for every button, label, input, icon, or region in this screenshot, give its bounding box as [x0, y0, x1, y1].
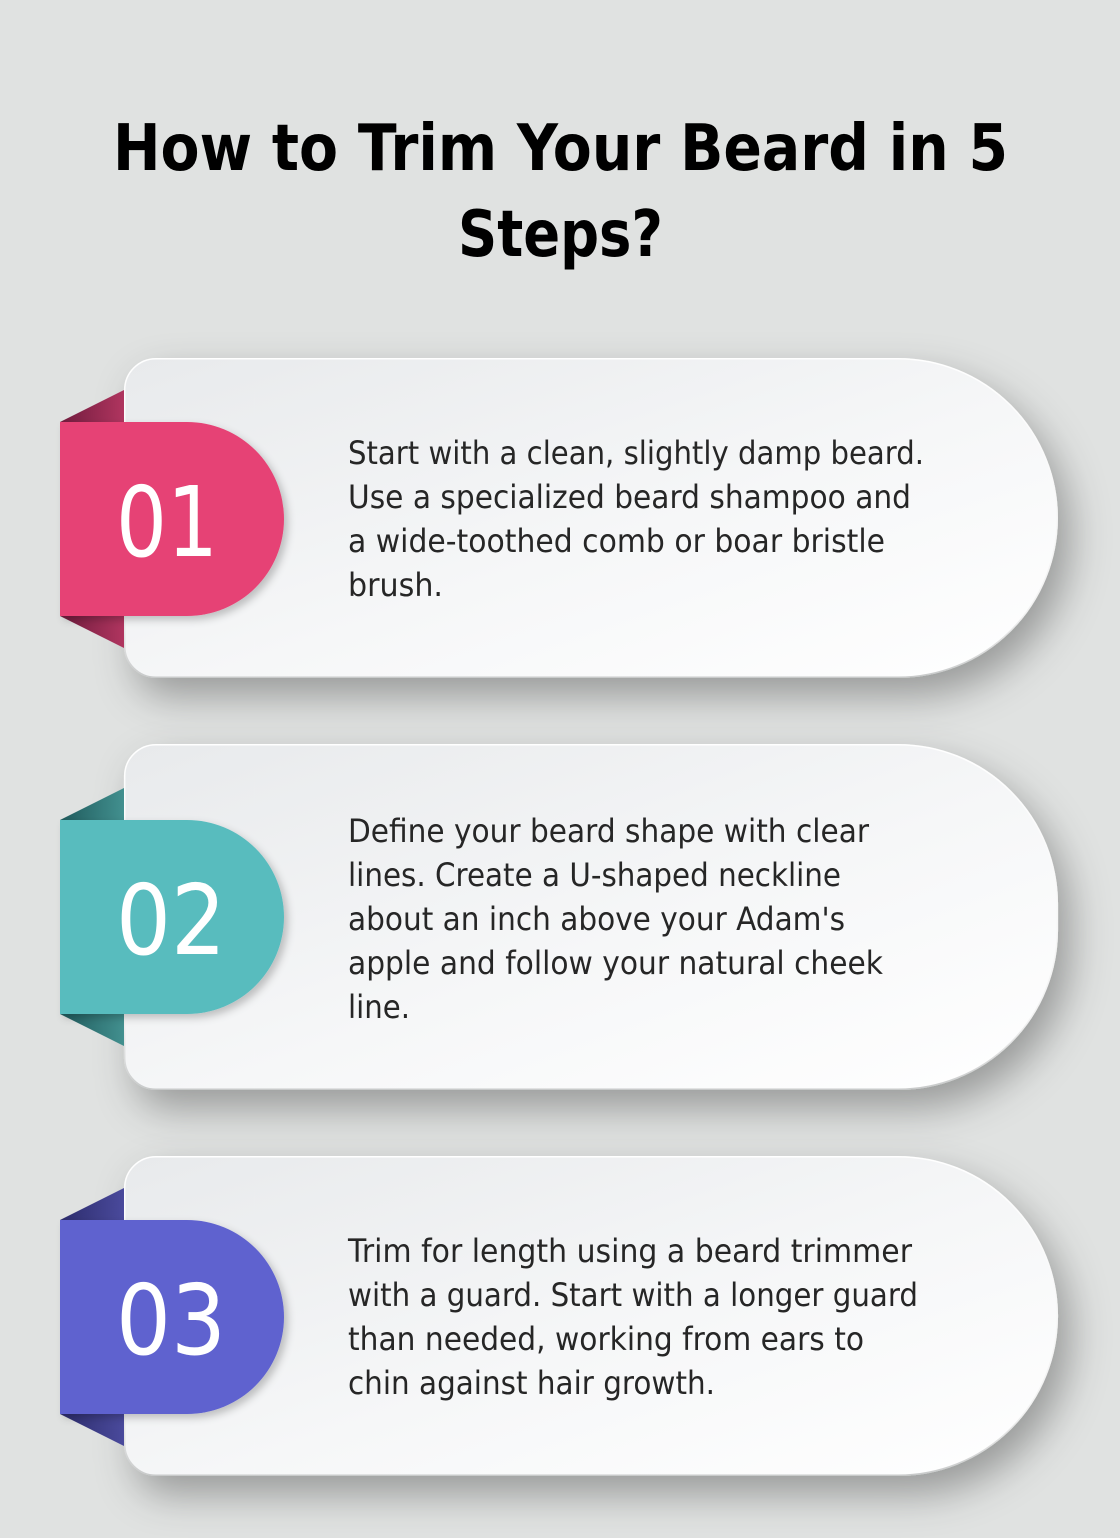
step 1 text: a wide-toothed comb or boar bristle: [348, 522, 885, 560]
step 2 text: line.: [348, 988, 410, 1026]
ribbon fold 3: [60, 1188, 124, 1446]
number badge 3: [60, 1220, 284, 1414]
number 02: 02: [116, 864, 226, 977]
number badge 2: [60, 820, 284, 1014]
step 3 text: Trim for length using a beard trimmer: [347, 1232, 913, 1270]
step 1 text: [348, 434, 924, 604]
ribbon fold 2: [60, 788, 124, 1046]
card 3 background: [125, 1157, 1057, 1475]
step 3 text: than needed, working from ears to: [348, 1320, 864, 1358]
number 03: 03: [116, 1264, 226, 1377]
step 2 text: apple and follow your natural cheek: [348, 944, 883, 982]
step 2 text: Define your beard shape with clear: [348, 812, 870, 850]
step 1 text: brush.: [348, 566, 443, 604]
title: How to Trim Your Beard in 5: [113, 112, 1008, 186]
step 2 text: [348, 812, 883, 1026]
panel: step 3: [60, 1157, 1057, 1475]
title: [113, 112, 1008, 272]
step 3 text: chin against hair growth.: [348, 1364, 715, 1402]
step 3 text: with a guard. Start with a longer guard: [348, 1276, 918, 1314]
step 2 text: lines. Create a U-shaped neckline: [348, 856, 841, 894]
step 1 text: Use a specialized beard shampoo and: [348, 478, 911, 516]
step 1 text: Start with a clean, slightly damp beard.: [348, 434, 924, 472]
title: Steps?: [458, 198, 663, 272]
panel: step 1: [60, 359, 1057, 677]
card 1 background: [125, 359, 1057, 677]
step 2 text: about an inch above your Adam's: [348, 900, 845, 938]
ribbon fold 1: [60, 390, 124, 648]
step 3 text: [347, 1232, 918, 1402]
panel: step 2: [60, 745, 1057, 1089]
card 2 background: [125, 745, 1057, 1089]
number 01: 01: [116, 466, 218, 579]
number badge 1: [60, 422, 284, 616]
